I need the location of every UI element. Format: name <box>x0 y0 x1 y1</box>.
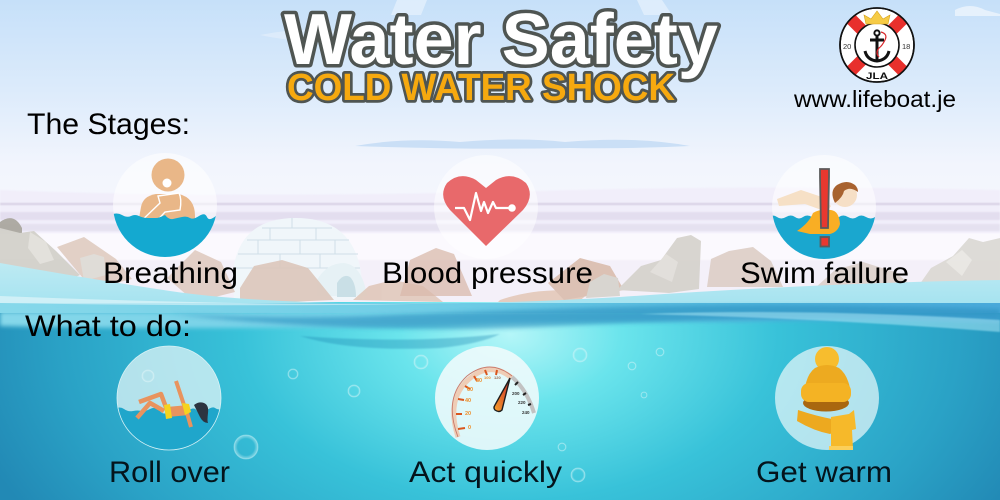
sea: underwater <box>0 302 1000 500</box>
sea: wave bands <box>0 296 1000 349</box>
label: Breathing: Breathing <box>103 257 238 290</box>
title: Cold Water Shock: COLD WATER SHOCK <box>287 67 676 109</box>
action: Get warm <box>756 346 892 489</box>
rocks brown middle right <box>400 235 701 304</box>
sea: bubbles <box>142 348 664 482</box>
icon: person floating on back <box>114 346 221 459</box>
icon: speedometer: 20 <box>465 411 471 417</box>
icon: speedometer <box>452 367 534 437</box>
logo: anchor <box>865 30 889 61</box>
title <box>284 0 718 109</box>
logo: JLA: JLA <box>866 71 889 81</box>
icon: speedometer: 120 <box>494 375 501 380</box>
sea: surface sheet <box>0 263 1000 306</box>
rocks brown centre <box>167 250 443 304</box>
action: Act quickly <box>409 346 562 489</box>
icon: struggling swimmer with warning mark <box>772 168 875 259</box>
logo: year 18: 18 <box>902 42 910 51</box>
action: Roll over <box>109 346 230 489</box>
logo: crown <box>864 11 890 24</box>
label: Act quickly: Act quickly <box>409 456 562 489</box>
icon: person struggling to breathe <box>114 158 216 257</box>
logo: year 20: 20 <box>843 42 851 51</box>
website: www.lifeboat.je <box>793 86 956 112</box>
icon: woolly hat and scarf <box>797 347 856 450</box>
stage: Blood pressure <box>382 155 593 290</box>
icon: speedometer: 0 <box>468 425 471 431</box>
icon: speedometer: 240 <box>522 410 530 415</box>
background: clouds <box>260 0 1000 149</box>
igloo <box>233 218 367 300</box>
icon: speedometer: 220 <box>518 400 526 405</box>
logo: JLA lifebuoy <box>840 8 914 82</box>
title: Water Safety: Water Safety <box>284 0 718 80</box>
label: Blood pressure: Blood pressure <box>382 257 593 290</box>
stage: Swim failure <box>740 155 909 290</box>
icon: speedometer: 100 <box>484 375 491 380</box>
icon: speedometer: 40 <box>465 398 471 404</box>
background: frozen horizon bands <box>0 187 1000 305</box>
rocks right <box>707 238 1000 288</box>
label: Swim failure: Swim failure <box>740 257 909 290</box>
stage: Breathing <box>103 153 238 290</box>
icon: speedometer: 60 <box>467 387 473 393</box>
label: Roll over: Roll over <box>109 456 230 489</box>
rocks left <box>0 218 132 289</box>
label: Get warm: Get warm <box>756 456 892 489</box>
icon: speedometer: 80 <box>476 378 482 384</box>
icon: speedometer: 200 <box>512 391 520 396</box>
background: sky <box>0 0 1000 300</box>
heading: What to do: What to do: <box>25 310 191 343</box>
icon: heart with pulse <box>443 176 530 246</box>
heading: The Stages: The Stages: <box>27 108 190 141</box>
